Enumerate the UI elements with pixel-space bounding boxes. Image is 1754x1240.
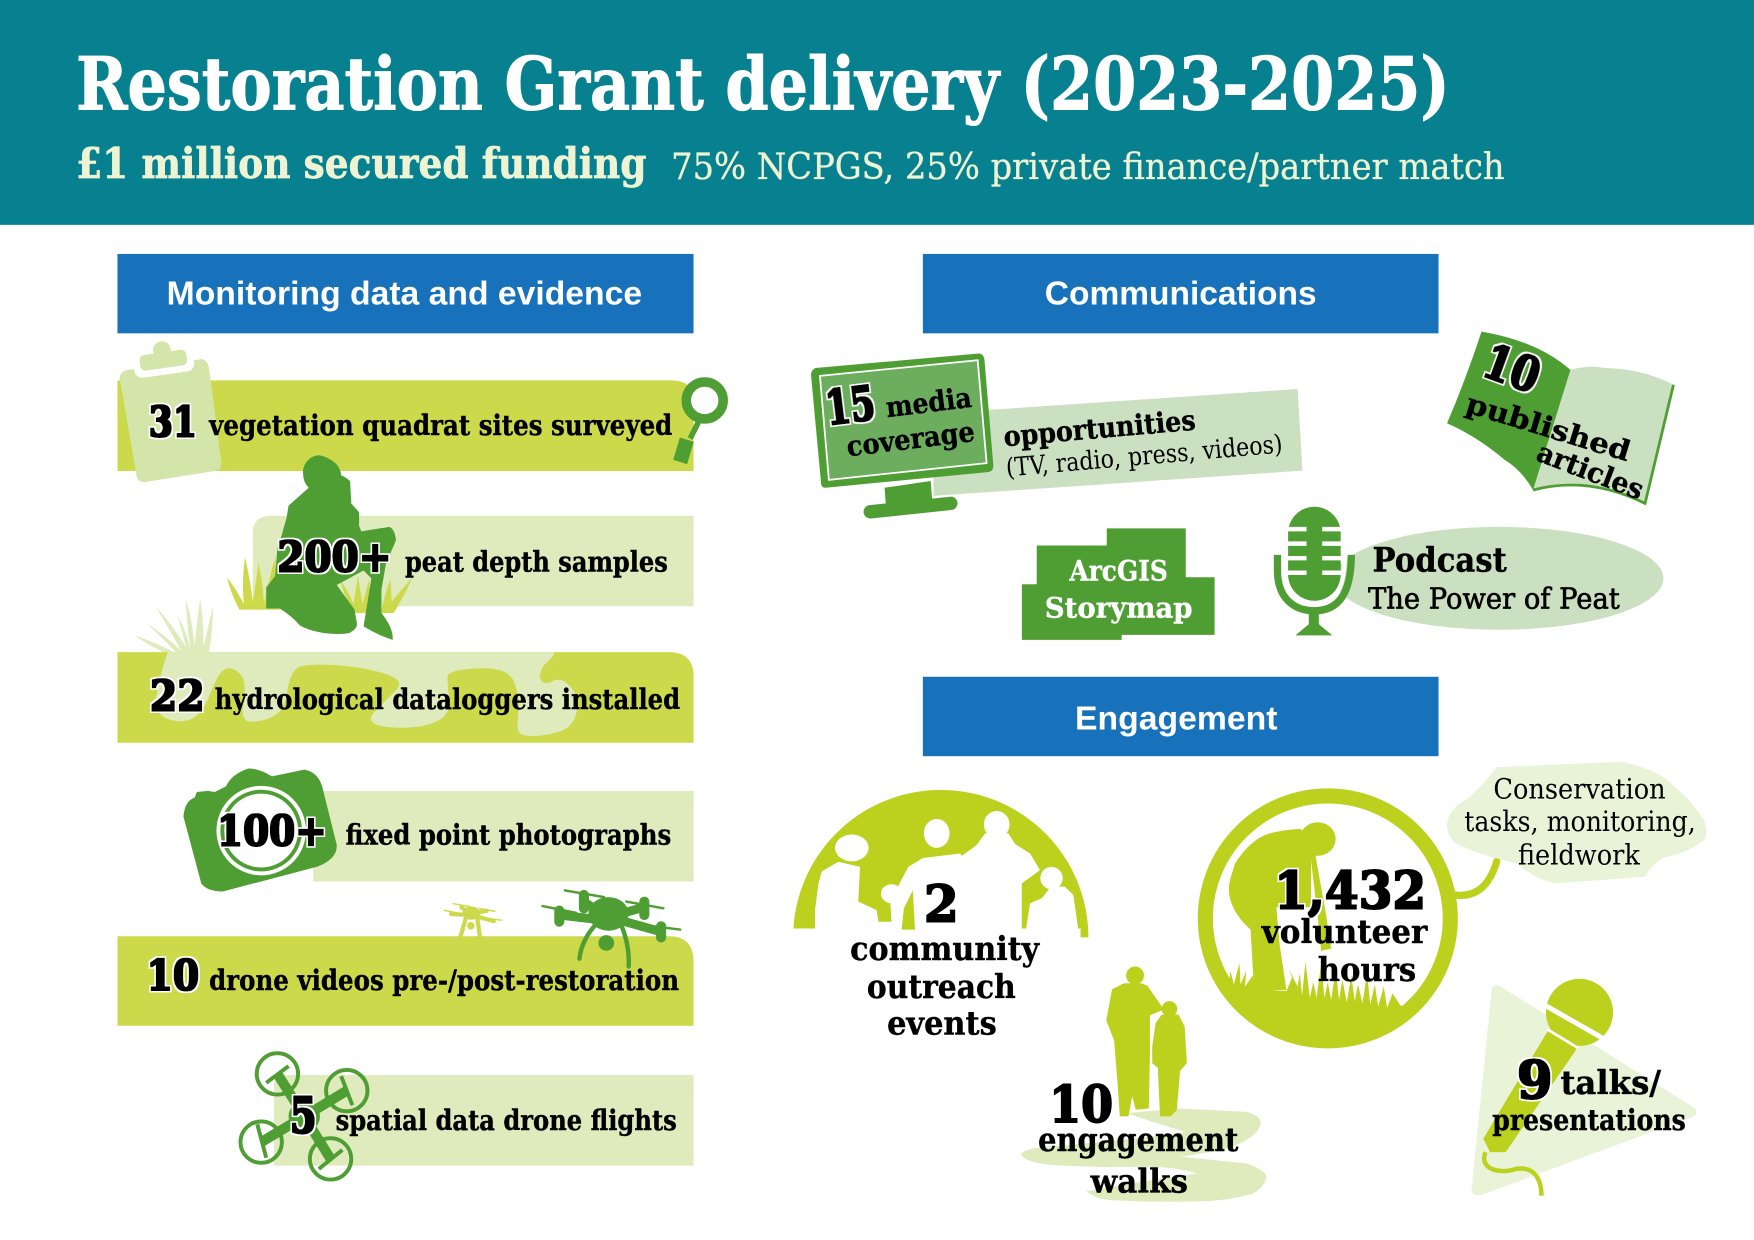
callout text: Conservation [1493,773,1666,806]
bar: vegetation quadrat sites [117,337,723,482]
bar: spatial data drone flights [241,1053,694,1180]
icon: community group silhouette [793,790,1088,937]
label: fixed point photographs: fixed point photographs [346,819,671,852]
label: hydrological dataloggers installed: hydrological dataloggers installed [215,683,680,716]
triangle backdrop [1477,990,1691,1190]
stat: 100+: 100+ [217,807,327,857]
heading: monitoring: Monitoring data and evidence [167,275,642,312]
title: Restoration Grant delivery (2023-2025) [76,43,1450,128]
panel: communications [811,254,1673,640]
item: media coverage [811,353,1302,512]
cloud bubble [1447,762,1706,883]
connector [1454,861,1497,895]
heading: communications: Communications [1045,275,1317,312]
stat: 15: 15 [822,375,878,437]
item: engagement walks [1021,968,1266,1202]
callout text: fieldwork [1518,839,1641,872]
icon: handheld microphone [1483,979,1613,1196]
bar: peat depth samples [227,455,694,640]
label: coverage: coverage [845,415,976,463]
path shape [1021,1109,1266,1202]
label: The Power of Peat: The Power of Peat [1368,582,1620,616]
subtitle: funding split: 75% NCPGS, 25% private finance/partner match [671,145,1505,188]
peat pool shapes [156,652,577,736]
label: engagement: engagement [1038,1121,1238,1159]
icon: volunteer in ring [1205,796,1454,1063]
bar: drone videos [117,890,694,1026]
panel: engagement [793,677,1706,1202]
item: volunteer hours [1205,796,1454,1063]
label: Podcast: Podcast [1373,540,1507,580]
header banner [0,0,1754,225]
heading: communications [923,254,1439,333]
callout text [1464,773,1696,872]
label: hours: hours [1318,951,1416,989]
label: community: community [850,930,1040,968]
label: peat depth samples: peat depth samples [405,546,668,579]
item: ArcGIS storymap [1022,528,1215,640]
label: outreach: outreach [867,968,1016,1006]
icon: open book [1447,332,1673,503]
label: ArcGIS: ArcGIS [1069,555,1168,588]
stat: 31: 31 [149,397,197,447]
icon: grass tufts [227,557,413,613]
label: drone videos pre-/post-restoration: drone videos pre-/post-restoration [209,964,679,997]
subtitle: funding amount: £1 million secured funding [76,139,647,189]
heading: monitoring [117,254,694,333]
heading: engagement [923,677,1439,756]
label: Storymap: Storymap [1045,591,1192,624]
label: presentations: presentations [1492,1103,1686,1137]
label: walks: walks [1090,1162,1188,1200]
stat: 9: 9 [1517,1050,1553,1111]
stat: 22: 22 [150,671,205,721]
icon: camera [183,768,337,892]
label: volunteer: volunteer [1261,913,1428,951]
item: talks and presentations [1477,979,1691,1196]
label: media: media [884,381,973,424]
callout text: tasks, monitoring, [1464,805,1696,838]
stat: 200+: 200+ [277,533,392,583]
icon: magnifying glass [680,382,723,462]
icon: top-down quadcopter [241,1053,367,1180]
label: spatial data drone flights: spatial data drone flights [336,1104,677,1137]
icon: clipboard [120,337,221,482]
stat: 2: 2 [924,875,959,934]
icon: large drone [543,890,680,966]
heading: engagement: Engagement [1075,700,1277,737]
label: vegetation quadrat sites surveyed: vegetation quadrat sites surveyed [208,409,672,442]
stat: 10 drone videos: 10 [147,951,199,1001]
icon: adult and child walkers [1107,968,1186,1115]
icon: monitor [811,353,993,512]
label: talks/: talks/ [1560,1064,1661,1102]
icon: studio microphone [1277,507,1351,635]
label: published: published [1462,387,1634,468]
stat: 10 walks: 10 [1049,1075,1113,1134]
stat: 1,432: 1,432 [1274,861,1426,921]
stat: 5: 5 [290,1087,317,1145]
panel: monitoring data and evidence [117,254,723,1180]
bar: hydrological dataloggers [117,598,694,743]
label: articles: articles [1532,435,1648,506]
item: published articles [1447,332,1673,506]
item: community outreach events [793,790,1088,1043]
callout: volunteer activities [1447,762,1706,895]
icon: small drone [444,904,502,938]
label: opportunities: opportunities [1002,404,1197,453]
bar: fixed point photographs [183,768,694,892]
label: events: events [887,1005,997,1043]
stat: 10 articles: 10 [1476,333,1548,405]
item: podcast [1277,507,1663,635]
icon: kneeling surveyor [266,455,396,640]
label: media types: (TV, radio, press, videos) [1005,429,1284,484]
icon: pale grass tuft [134,598,213,662]
